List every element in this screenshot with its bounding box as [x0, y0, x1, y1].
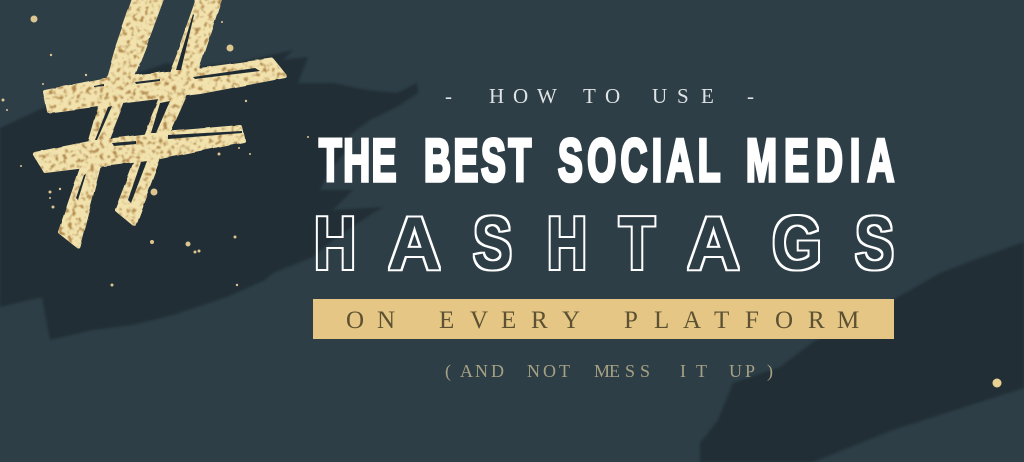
title: hashtags outlined: S — [473, 201, 512, 285]
title: hashtags outlined: H — [314, 201, 356, 285]
slits in hash — [76, 14, 260, 203]
title: hashtags outlined: H — [547, 201, 587, 285]
title: hashtags outlined: S — [855, 201, 894, 285]
title: hashtags outlined: G — [772, 201, 822, 285]
title: hashtags outlined: A — [388, 201, 441, 285]
title: hashtags outlined: T — [619, 201, 655, 285]
footer text: and not mess it up: (AND NOT MESS IT UP) — [0, 361, 773, 382]
gold banner — [0, 299, 894, 339]
brush stroke: bottom right — [700, 242, 1024, 462]
title: hashtags outlined — [314, 201, 894, 285]
gold paint specks — [2, 16, 1002, 388]
icon: gold hash symbol — [35, 0, 285, 246]
title: the best social media — [319, 127, 894, 194]
title: the best social media: THE — [319, 127, 397, 194]
kicker: how to use: - HOW TO USE - — [0, 84, 754, 108]
title: the best social media: MEDIA — [746, 127, 894, 194]
title: the best social media: SOCIAL — [558, 127, 720, 194]
banner text: on every platform: ON EVERY PLATFORM — [0, 307, 859, 334]
brush stroke: left — [0, 50, 418, 340]
title: hashtags outlined: A — [687, 201, 740, 285]
title: the best social media: BEST — [424, 127, 531, 194]
